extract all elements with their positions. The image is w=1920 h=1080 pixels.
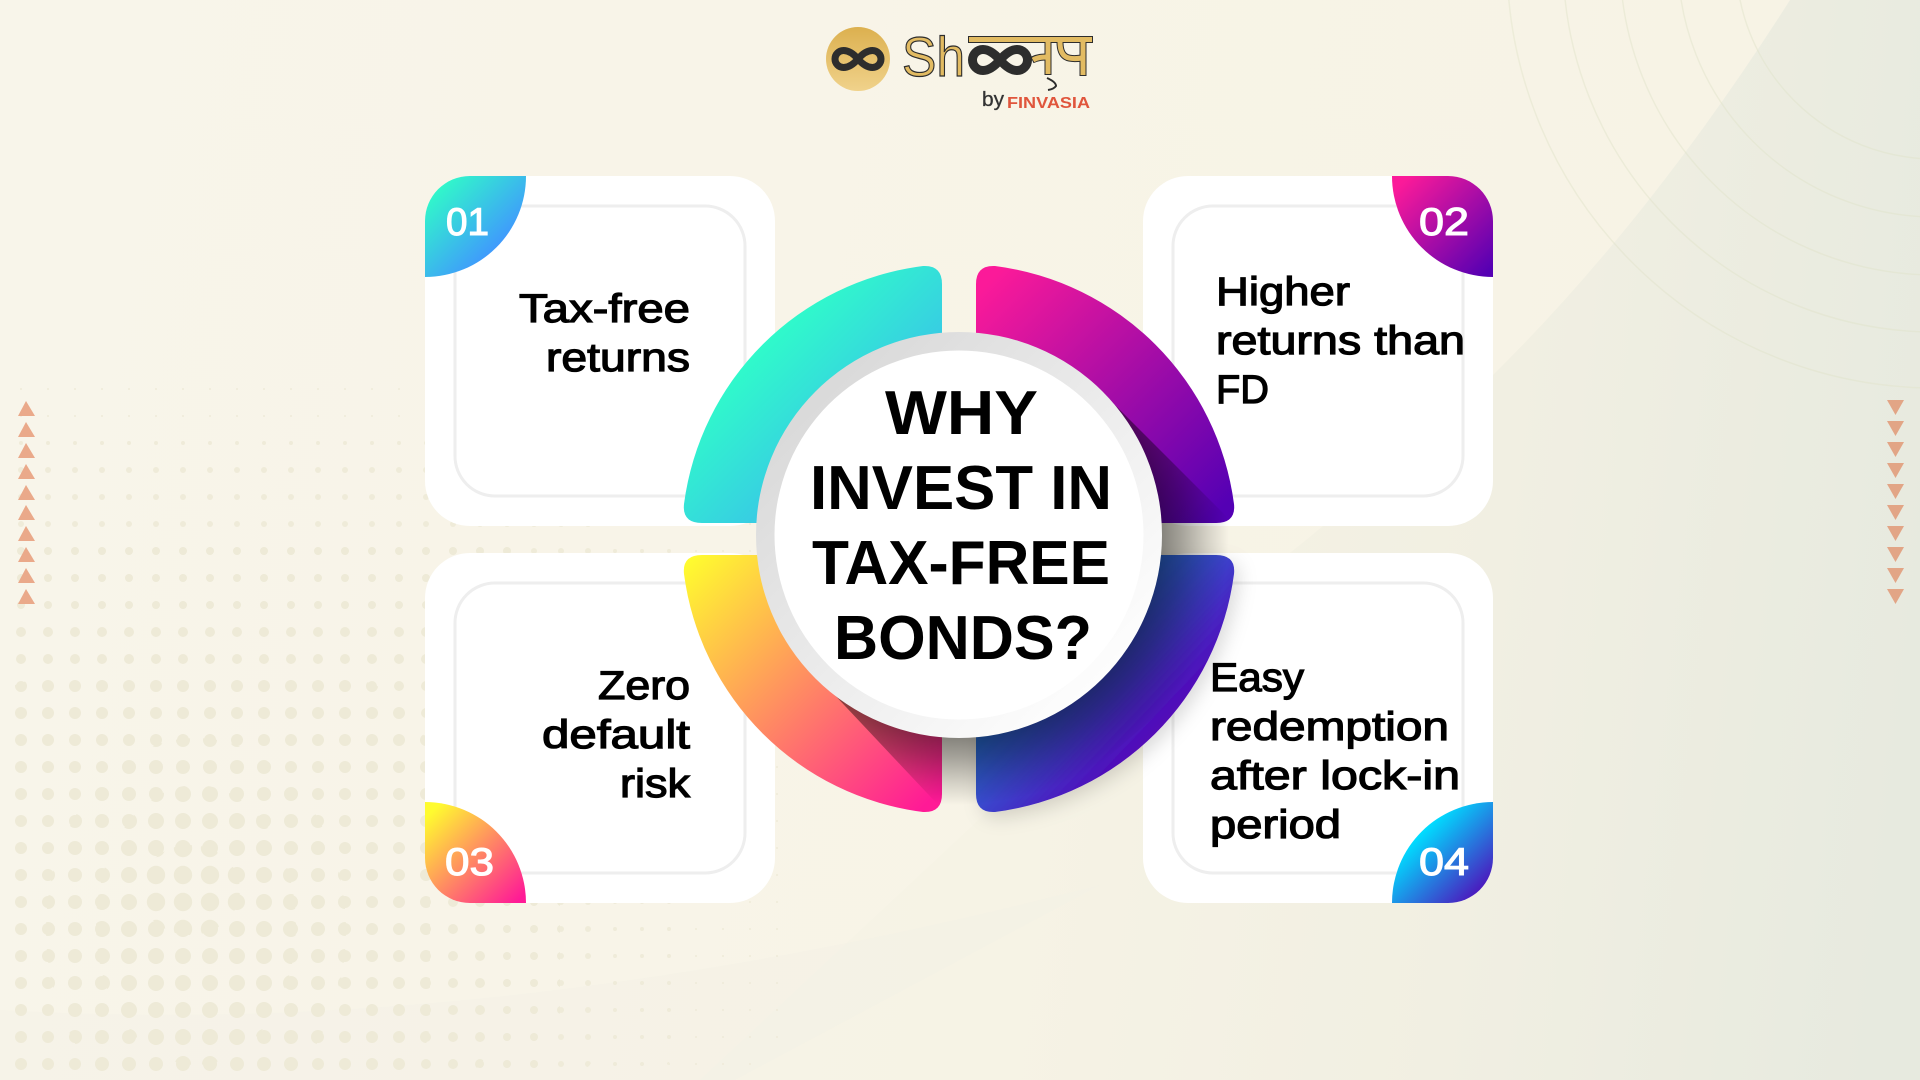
card text: Tax-free [519, 287, 690, 331]
title: BONDS? [834, 604, 1092, 673]
long cast shadow of centre circle [830, 405, 1300, 860]
title: TAX-FREE [812, 529, 1110, 598]
number tab 01: 01 [446, 201, 489, 244]
number tab 03 [425, 802, 526, 903]
number tab 04: 04 [1419, 841, 1469, 884]
logo [826, 25, 1093, 112]
title: INVEST IN [810, 454, 1112, 523]
number tab 04 [1392, 802, 1493, 903]
card text [542, 664, 691, 806]
card 04 text and number tab [1210, 656, 1493, 903]
halftone dot field [0, 378, 790, 1080]
card text: risk [620, 762, 691, 806]
by finvasia: by [982, 89, 1004, 111]
number tab 03: 03 [445, 841, 494, 884]
ring segment: top right magenta [976, 266, 1234, 523]
number tab 02: 02 [1419, 201, 1469, 244]
by finvasia [982, 89, 1091, 112]
ring segment: top left teal [684, 266, 942, 523]
card text: FD [1216, 368, 1269, 412]
card text: returns than [1216, 319, 1465, 363]
card text [1210, 656, 1460, 847]
right column of down triangles [1887, 400, 1904, 604]
card text: Zero [598, 664, 690, 708]
number tab 02 [1392, 176, 1493, 277]
panel: card 04 [1143, 553, 1493, 903]
card text: period [1210, 803, 1341, 847]
by finvasia: FINVASIA [1007, 95, 1091, 112]
card text [1216, 270, 1465, 412]
card text: after lock-in [1210, 754, 1460, 798]
title [810, 379, 1112, 673]
card text [519, 287, 690, 380]
card text: returns [546, 336, 690, 380]
title: WHY [885, 379, 1038, 448]
icon: infinity badge [826, 27, 890, 91]
number tab 01 [425, 176, 526, 277]
logo wordmark [902, 25, 1093, 90]
centre circle [756, 332, 1162, 738]
card text: Easy [1210, 656, 1304, 700]
ring segment: bottom left yellow [684, 555, 942, 812]
logo wordmark: Sh [902, 25, 965, 88]
panel: card 03 [425, 553, 775, 903]
card text: redemption [1210, 705, 1449, 749]
card text: default [542, 713, 690, 757]
ring segment: bottom right blue [976, 555, 1234, 812]
left column of up triangles [18, 401, 35, 604]
panel: card 02 [1143, 176, 1493, 526]
panel: card 01 [425, 176, 775, 526]
card text: Higher [1216, 270, 1350, 314]
